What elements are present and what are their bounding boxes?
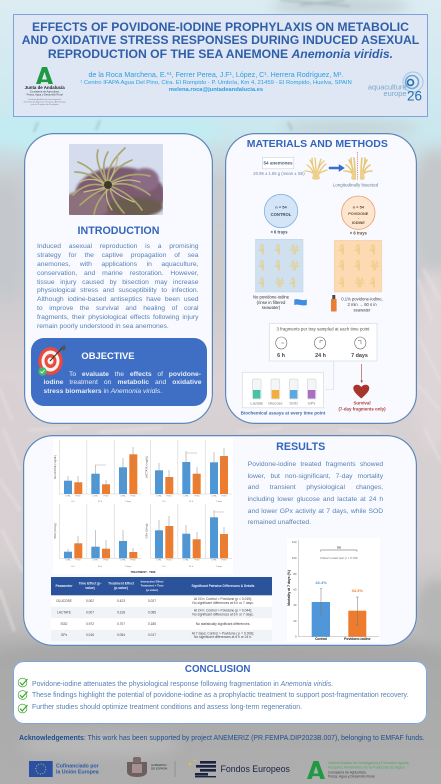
arrow: to survival bbox=[360, 364, 363, 383]
table: statistics summary: 0.085 bbox=[148, 610, 156, 614]
note: no povidone-iodine: No povidone-iodine bbox=[253, 294, 290, 300]
sampling box with time points: 6 h bbox=[277, 353, 285, 359]
text: results summary: lower, but non-significant, 7-day mortality bbox=[248, 473, 383, 480]
sampling box with time points bbox=[269, 323, 377, 361]
chart: biomarkers bar charts: GLUCOSE (mg/dL) bbox=[53, 455, 57, 479]
table: statistics summary: Time Effect (p- bbox=[79, 582, 101, 586]
table: statistics summary: 0.007 bbox=[86, 610, 94, 614]
logo: aquaculture europe 26: 26 bbox=[407, 88, 422, 104]
chart: mortality at 7 days: 0 bbox=[295, 635, 297, 639]
text: introduction body: Although iodine-based antiseptics have been used bbox=[37, 296, 198, 303]
text: conclusion points bbox=[32, 680, 408, 711]
panel: introduction bbox=[24, 133, 213, 424]
logo: EU bbox=[29, 761, 99, 777]
text: introduction body: Induced asexual reproduction is a promising bbox=[37, 243, 198, 250]
chart: mortality at 7 days bbox=[287, 538, 380, 642]
text: introduction body: physiological stress and susceptibility to infection. bbox=[37, 287, 198, 294]
group: povidone-iodine: IODINE bbox=[352, 221, 365, 225]
panel: conclusion bbox=[13, 661, 427, 724]
chart: biomarkers bar charts: CTRL bbox=[183, 560, 190, 562]
chart: biomarkers bar charts: 6 h bbox=[71, 566, 75, 568]
logo: EU: la Unión Europea bbox=[56, 770, 99, 776]
text: introduction body: conservation, and marine restoration. However, bbox=[37, 270, 198, 277]
chart: biomarkers bar charts: PVID bbox=[221, 496, 227, 498]
table: statistics summary: No significant differences at 6 h or 7 days. bbox=[192, 601, 254, 605]
table: statistics summary: LACTATE bbox=[57, 610, 71, 614]
note: povidone treatment: 0.1% povidone-iodine, bbox=[341, 296, 383, 302]
table: statistics summary: 0.318 bbox=[117, 610, 125, 614]
chart: biomarkers bar charts: PVID bbox=[103, 496, 109, 498]
logo: Instituto Andaluz bbox=[307, 761, 409, 779]
icon: heart bbox=[353, 385, 369, 398]
acknowledgements: Acknowledgements: This work has been supported by project ANEMERIZ (PR.FEMPA.DIP2023B.007), belonging to EMFAF funds. bbox=[19, 734, 424, 742]
chart: mortality at 7 days: Mortality at 7 days (%) bbox=[287, 570, 291, 606]
text: objective statement bbox=[44, 370, 202, 395]
table: statistics summary: Parameter bbox=[55, 584, 73, 588]
group: control: n = 54 bbox=[275, 204, 288, 210]
note: povidone treatment: 2 min → 60 s in bbox=[347, 302, 377, 307]
label: biochemical assays: Biochemical assays at every time point bbox=[241, 410, 326, 416]
table: statistics summary: 0.054 bbox=[117, 633, 125, 637]
table: statistics summary: value) bbox=[85, 586, 95, 590]
logo: Gobierno de España: DE ESPAÑA bbox=[151, 766, 167, 771]
note: no povidone-iodine bbox=[253, 294, 290, 310]
text: introduction body: tissue injury caused by bisection may increase bbox=[37, 278, 198, 286]
authors and affiliation: ¹ Centro IFAPA Agua Del Pino, Ctra. El Rompido - P. Umbría, Km 4, 21459 - El Rompido, Huelva, SPAIN bbox=[80, 80, 352, 86]
text: introduction body: remain poorly understood in sea anemones. bbox=[37, 323, 169, 330]
table: statistics summary: 0.423 bbox=[117, 599, 125, 603]
text: introduction body: anemones, with applications in aquaculture, bbox=[37, 261, 198, 268]
chart: mortality at 7 days: 100 bbox=[292, 556, 297, 560]
logo: Fondos Europeos: Fondos Europeos bbox=[220, 764, 291, 774]
table: statistics summary: 0.185 bbox=[148, 622, 156, 626]
panel: results bbox=[23, 435, 417, 646]
logo: Junta de Andalucía: Instituto Andaluz de Investigación bbox=[28, 98, 62, 101]
table: statistics summary: Significant Pairwise Differences & Details bbox=[192, 584, 255, 588]
table: statistics summary: At 7 days: Control > Povidone ( p = 0.003); bbox=[192, 631, 254, 635]
group: control: CONTROL bbox=[271, 212, 292, 217]
table: statistics summary: (p-value) bbox=[146, 588, 158, 592]
text: results summary bbox=[248, 461, 384, 526]
chart: biomarkers bar charts: PVID bbox=[194, 560, 200, 562]
logo: Junta de Andalucía: y de la Producción Ecológica bbox=[31, 103, 60, 106]
chart: biomarkers bar charts: 24 h bbox=[189, 501, 194, 503]
text: results summary: and lower GPx activity at 7 days, while SOD bbox=[248, 508, 383, 515]
text: objective statement: stress biomarkers in Anemonia viridis. bbox=[44, 388, 162, 395]
table: statistics summary: 0.002 bbox=[86, 599, 94, 603]
table: statistics summary: 0.017 bbox=[148, 633, 156, 637]
chart: biomarkers bar charts: PVID bbox=[130, 496, 136, 498]
chart: biomarkers bar charts: 6 h bbox=[162, 566, 166, 568]
chart: biomarkers bar charts: CTRL bbox=[65, 560, 72, 562]
biochemical assays box bbox=[242, 372, 324, 408]
chart: biomarkers bar charts: PVID bbox=[75, 496, 81, 498]
text: results summary: including lower glucose and lactate at 24 h bbox=[248, 496, 383, 503]
biochemical assays box: Glucose bbox=[268, 400, 283, 405]
text: results summary: Povidone-iodine treated fragments showed bbox=[248, 461, 383, 468]
table: statistics summary: At 24 h: Control > Povidone (p = 0.019); bbox=[194, 597, 252, 601]
chart: mortality at 7 days: Fisher's exact test: p = 0.700 bbox=[321, 556, 358, 560]
authors and affiliation: melena.roca@juntadeandalucia.es bbox=[169, 87, 263, 93]
group: control: × 6 trays bbox=[270, 230, 288, 235]
biochemical assays box: SOD bbox=[289, 400, 298, 405]
chart: biomarkers bar charts: 7 days bbox=[125, 501, 132, 503]
results graphics bbox=[51, 440, 379, 641]
heading: materials and methods: MATERIALS AND METHODS bbox=[247, 138, 388, 150]
chart: biomarkers bar charts: 24 h bbox=[189, 566, 194, 568]
chart: biomarkers bar charts: PVID bbox=[130, 560, 136, 562]
title: EFFECTS OF POVIDONE-IODINE PROPHYLAXIS ON METABOLIC bbox=[32, 20, 409, 34]
text: conclusion points: Povidone-iodine attenuates the physiological response following fragmentation in Anemonia viridis. bbox=[32, 681, 333, 688]
label: survival bbox=[338, 401, 386, 411]
chart: biomarkers bar charts: 7 days bbox=[125, 566, 132, 568]
arrow: to biochemical assays bbox=[326, 361, 334, 389]
title: REPRODUCTION OF THE SEA ANEMONE Anemonia viridis. bbox=[48, 47, 393, 61]
logo: aquaculture europe 26: europe bbox=[383, 89, 406, 98]
table: statistics summary: (p-value) bbox=[114, 586, 128, 590]
heading: objective: OBJECTIVE bbox=[81, 350, 135, 361]
note: no povidone-iodine: (rinse in filtered bbox=[257, 300, 286, 305]
biochemical assays box: Lactate bbox=[250, 400, 263, 405]
icon: water bbox=[294, 299, 307, 305]
label: survival: Survival bbox=[353, 401, 371, 406]
chart: biomarkers bar charts: 24 h bbox=[98, 501, 103, 503]
table: statistics summary: No significant differences at 6 h or 7 days. bbox=[192, 612, 254, 616]
chart: mortality at 7 days: 44.4% bbox=[315, 580, 327, 585]
heading: introduction: INTRODUCTION bbox=[78, 225, 159, 237]
chart: biomarkers bar charts: CTRL bbox=[211, 496, 218, 498]
sample box: 54 anemones bbox=[253, 157, 305, 176]
chart: mortality at 7 days: 80 bbox=[293, 572, 297, 576]
chart: biomarkers bar charts: 24 h bbox=[98, 566, 103, 568]
chart: biomarkers bar charts: CTRL bbox=[156, 496, 163, 498]
sample box: 54 anemones: 20.96 ± 1.55 g (mean ± SE) bbox=[253, 171, 305, 176]
group: povidone-iodine bbox=[342, 196, 375, 236]
logo: EU: Cofinanciado por bbox=[56, 763, 99, 769]
table: statistics summary: At 24 h: Control > Povidone (p = 0.044); bbox=[194, 608, 252, 612]
title bbox=[22, 20, 419, 61]
arrow: to bisected anemone bbox=[329, 164, 344, 172]
table: statistics summary: Treatment × Time bbox=[140, 584, 164, 588]
chart: biomarkers bar charts: CTRL bbox=[93, 496, 99, 498]
group: povidone-iodine: POVIDONE bbox=[348, 212, 369, 216]
text: introduction body: strategy for the captive propagation of sea bbox=[37, 252, 198, 259]
chart: biomarkers bar charts: CTRL bbox=[93, 560, 99, 562]
icon: target with arrow bbox=[38, 344, 66, 376]
heading: conclusion: CONCLUSION bbox=[185, 664, 250, 675]
label: survival: (7-day fragments only) bbox=[338, 406, 386, 411]
chart: biomarkers bar charts: 6 h bbox=[71, 501, 75, 503]
tray: control bbox=[256, 239, 303, 292]
biochemical assays box: GPx bbox=[308, 400, 315, 405]
chart: biomarkers bar charts: 6 h bbox=[162, 501, 166, 503]
chart: biomarkers bar charts: 7 days bbox=[216, 501, 223, 503]
tray: povidone-iodine bbox=[334, 240, 382, 292]
logo: Instituto Andaluz: Pesquera, Alimentaria y de la Producción Ecológica bbox=[328, 765, 405, 769]
text: introduction body: to improve the survival and healing of coral bbox=[37, 305, 198, 312]
note: povidone treatment: seawater bbox=[354, 307, 371, 312]
chart: biomarkers bar charts: PVID bbox=[103, 560, 109, 562]
chart: biomarkers bar charts: SOD (U/mg) bbox=[53, 523, 57, 539]
chart: biomarkers bar charts: CTRL bbox=[211, 560, 218, 562]
chart: biomarkers bar charts: CTRL bbox=[65, 496, 72, 498]
table: statistics summary: 0.972 bbox=[86, 622, 94, 626]
chart: mortality at 7 days: 33.3% bbox=[352, 588, 363, 593]
chart: biomarkers bar charts: LACTATE (mg/dL) bbox=[144, 456, 148, 478]
title: AND OXIDATIVE STRESS RESPONSES DURING INDUCED ASEXUAL bbox=[22, 33, 419, 47]
text: results summary: and transient physiological changes, bbox=[248, 484, 383, 491]
chart: mortality at 7 days: Control bbox=[315, 637, 327, 641]
table: statistics summary: 0.027 bbox=[148, 599, 156, 603]
note: povidone treatment bbox=[341, 296, 383, 312]
table: statistics summary: No significant differences at 6 h or 24 h. bbox=[194, 635, 252, 639]
authors and affiliation: de la Roca Marchena, E.*¹, Ferrer Perea, J.F¹, López, C¹. Herrera Rodríguez, M¹. bbox=[88, 71, 344, 79]
group: povidone-iodine: - bbox=[358, 216, 360, 220]
text: conclusion points: Further studies should optimize treatment conditions and assess long-term regeneration. bbox=[32, 704, 302, 711]
logo: Junta de Andalucía: Pesca, Agua y Desarrollo Rural bbox=[27, 92, 63, 96]
table: statistics summary: No statistically significant differences. bbox=[196, 622, 250, 626]
chart: biomarkers bar charts: PVID bbox=[194, 496, 200, 498]
icon: povidone bottle bbox=[331, 295, 337, 312]
logo: aquaculture europe 26: aquaculture bbox=[368, 82, 406, 92]
icon: bisected anemone: Longitudinally bisected bbox=[333, 182, 379, 188]
table: statistics summary: GLUCOSE bbox=[56, 599, 72, 603]
chart: biomarkers bar charts: PVID bbox=[221, 560, 227, 562]
panel: materials and methods bbox=[225, 133, 417, 424]
text: objective statement: iodine treatment on metabolic and oxidative bbox=[44, 379, 202, 386]
logo: Gobierno de España: GOBIERNO bbox=[151, 763, 167, 767]
chart: biomarkers bar charts: GPx (U/mg) bbox=[144, 524, 148, 538]
table: statistics summary: 0.016 bbox=[86, 633, 94, 637]
chart: biomarkers bar charts: PVID bbox=[166, 560, 172, 562]
chart: biomarkers bar charts: 7 days bbox=[216, 566, 223, 568]
group: povidone-iodine: n = 54 bbox=[353, 204, 365, 210]
chart: biomarkers bar charts: PVID bbox=[166, 496, 172, 498]
chart: mortality at 7 days: 120 bbox=[292, 540, 297, 544]
chart: mortality at 7 days: Povidone-iodine bbox=[344, 637, 371, 641]
chart: biomarkers bar charts: PVID bbox=[75, 560, 81, 562]
logo: Instituto Andaluz: Consejería de Agricultura, bbox=[328, 771, 367, 775]
chart: biomarkers bar charts bbox=[53, 438, 233, 574]
text: introduction body: fragments, their physiological effects following injury bbox=[37, 314, 198, 321]
note: no povidone-iodine: seawater) bbox=[262, 305, 281, 310]
icon: whole anemone bbox=[305, 158, 327, 179]
chart: biomarkers bar charts: TREATMENT · TIME bbox=[130, 570, 156, 574]
icon: bisected anemone bbox=[333, 152, 379, 188]
table: statistics summary: 0.707 bbox=[117, 622, 125, 626]
chart: biomarkers bar charts: CTRL bbox=[120, 496, 127, 498]
chart: mortality at 7 days: 40 bbox=[293, 603, 297, 607]
table: statistics summary: SOD bbox=[61, 622, 68, 626]
chart: biomarkers bar charts: CTRL bbox=[183, 496, 190, 498]
header panel bbox=[13, 14, 428, 117]
logo: Instituto Andaluz: Pesca, Agua y Desarrollo Rural bbox=[328, 775, 375, 779]
text: objective statement: To evaluate the effects of povidone- bbox=[69, 370, 201, 378]
chart: biomarkers bar charts: CTRL bbox=[120, 560, 127, 562]
text: results summary: remained unaffected. bbox=[248, 519, 311, 526]
chart: mortality at 7 days: 20 bbox=[293, 619, 297, 623]
logo: Junta de Andalucía: y Formación Agraria, Pesquera, Alimentaria bbox=[24, 100, 67, 103]
authors and affiliation bbox=[80, 71, 352, 93]
logo: Fondos Europeos bbox=[188, 759, 291, 777]
table: statistics summary: Treatment Effect bbox=[108, 582, 135, 586]
panel: objective bbox=[31, 338, 207, 406]
logo: aquaculture europe 26 bbox=[368, 72, 423, 104]
sample box: 54 anemones: 54 anemones bbox=[263, 161, 293, 166]
group: control bbox=[264, 194, 298, 235]
table: statistics summary: GPx bbox=[61, 633, 68, 637]
icons: green check marks bbox=[18, 678, 28, 714]
logo: Junta de Andalucía bbox=[24, 67, 424, 106]
methods flow diagram bbox=[240, 152, 386, 416]
sampling box with time points: 24 h bbox=[315, 353, 326, 359]
chart: mortality at 7 days: ns bbox=[337, 546, 341, 550]
chart: biomarkers bar charts: CTRL bbox=[156, 560, 163, 562]
photo: sea anemone bbox=[69, 144, 163, 215]
logo: Instituto Andaluz: Instituto Andaluz de Investigación y Formación Agraria, bbox=[328, 761, 409, 765]
table: statistics summary bbox=[51, 577, 272, 641]
sampling box with time points: 3 fragments per tray sampled at each time point bbox=[277, 326, 370, 332]
logo: Junta de Andalucía: Junta de Andalucía bbox=[25, 85, 65, 90]
logo: Junta de Andalucía: Consejería de Agricultura, bbox=[30, 90, 60, 94]
group: povidone-iodine: × 6 trays bbox=[350, 231, 368, 236]
text: introduction body bbox=[37, 243, 198, 330]
text: conclusion points: These findings highlight the potential of povidone-iodine as a prophylactic treatment to support post-fragmentation recovery. bbox=[32, 692, 408, 699]
chart: mortality at 7 days: 60 bbox=[293, 588, 297, 592]
sampling box with time points: 7 days bbox=[351, 353, 368, 359]
heading: results: RESULTS bbox=[276, 441, 325, 453]
logo: Gobierno de España bbox=[127, 757, 175, 777]
table: statistics summary: Interaction Effect bbox=[141, 580, 163, 584]
